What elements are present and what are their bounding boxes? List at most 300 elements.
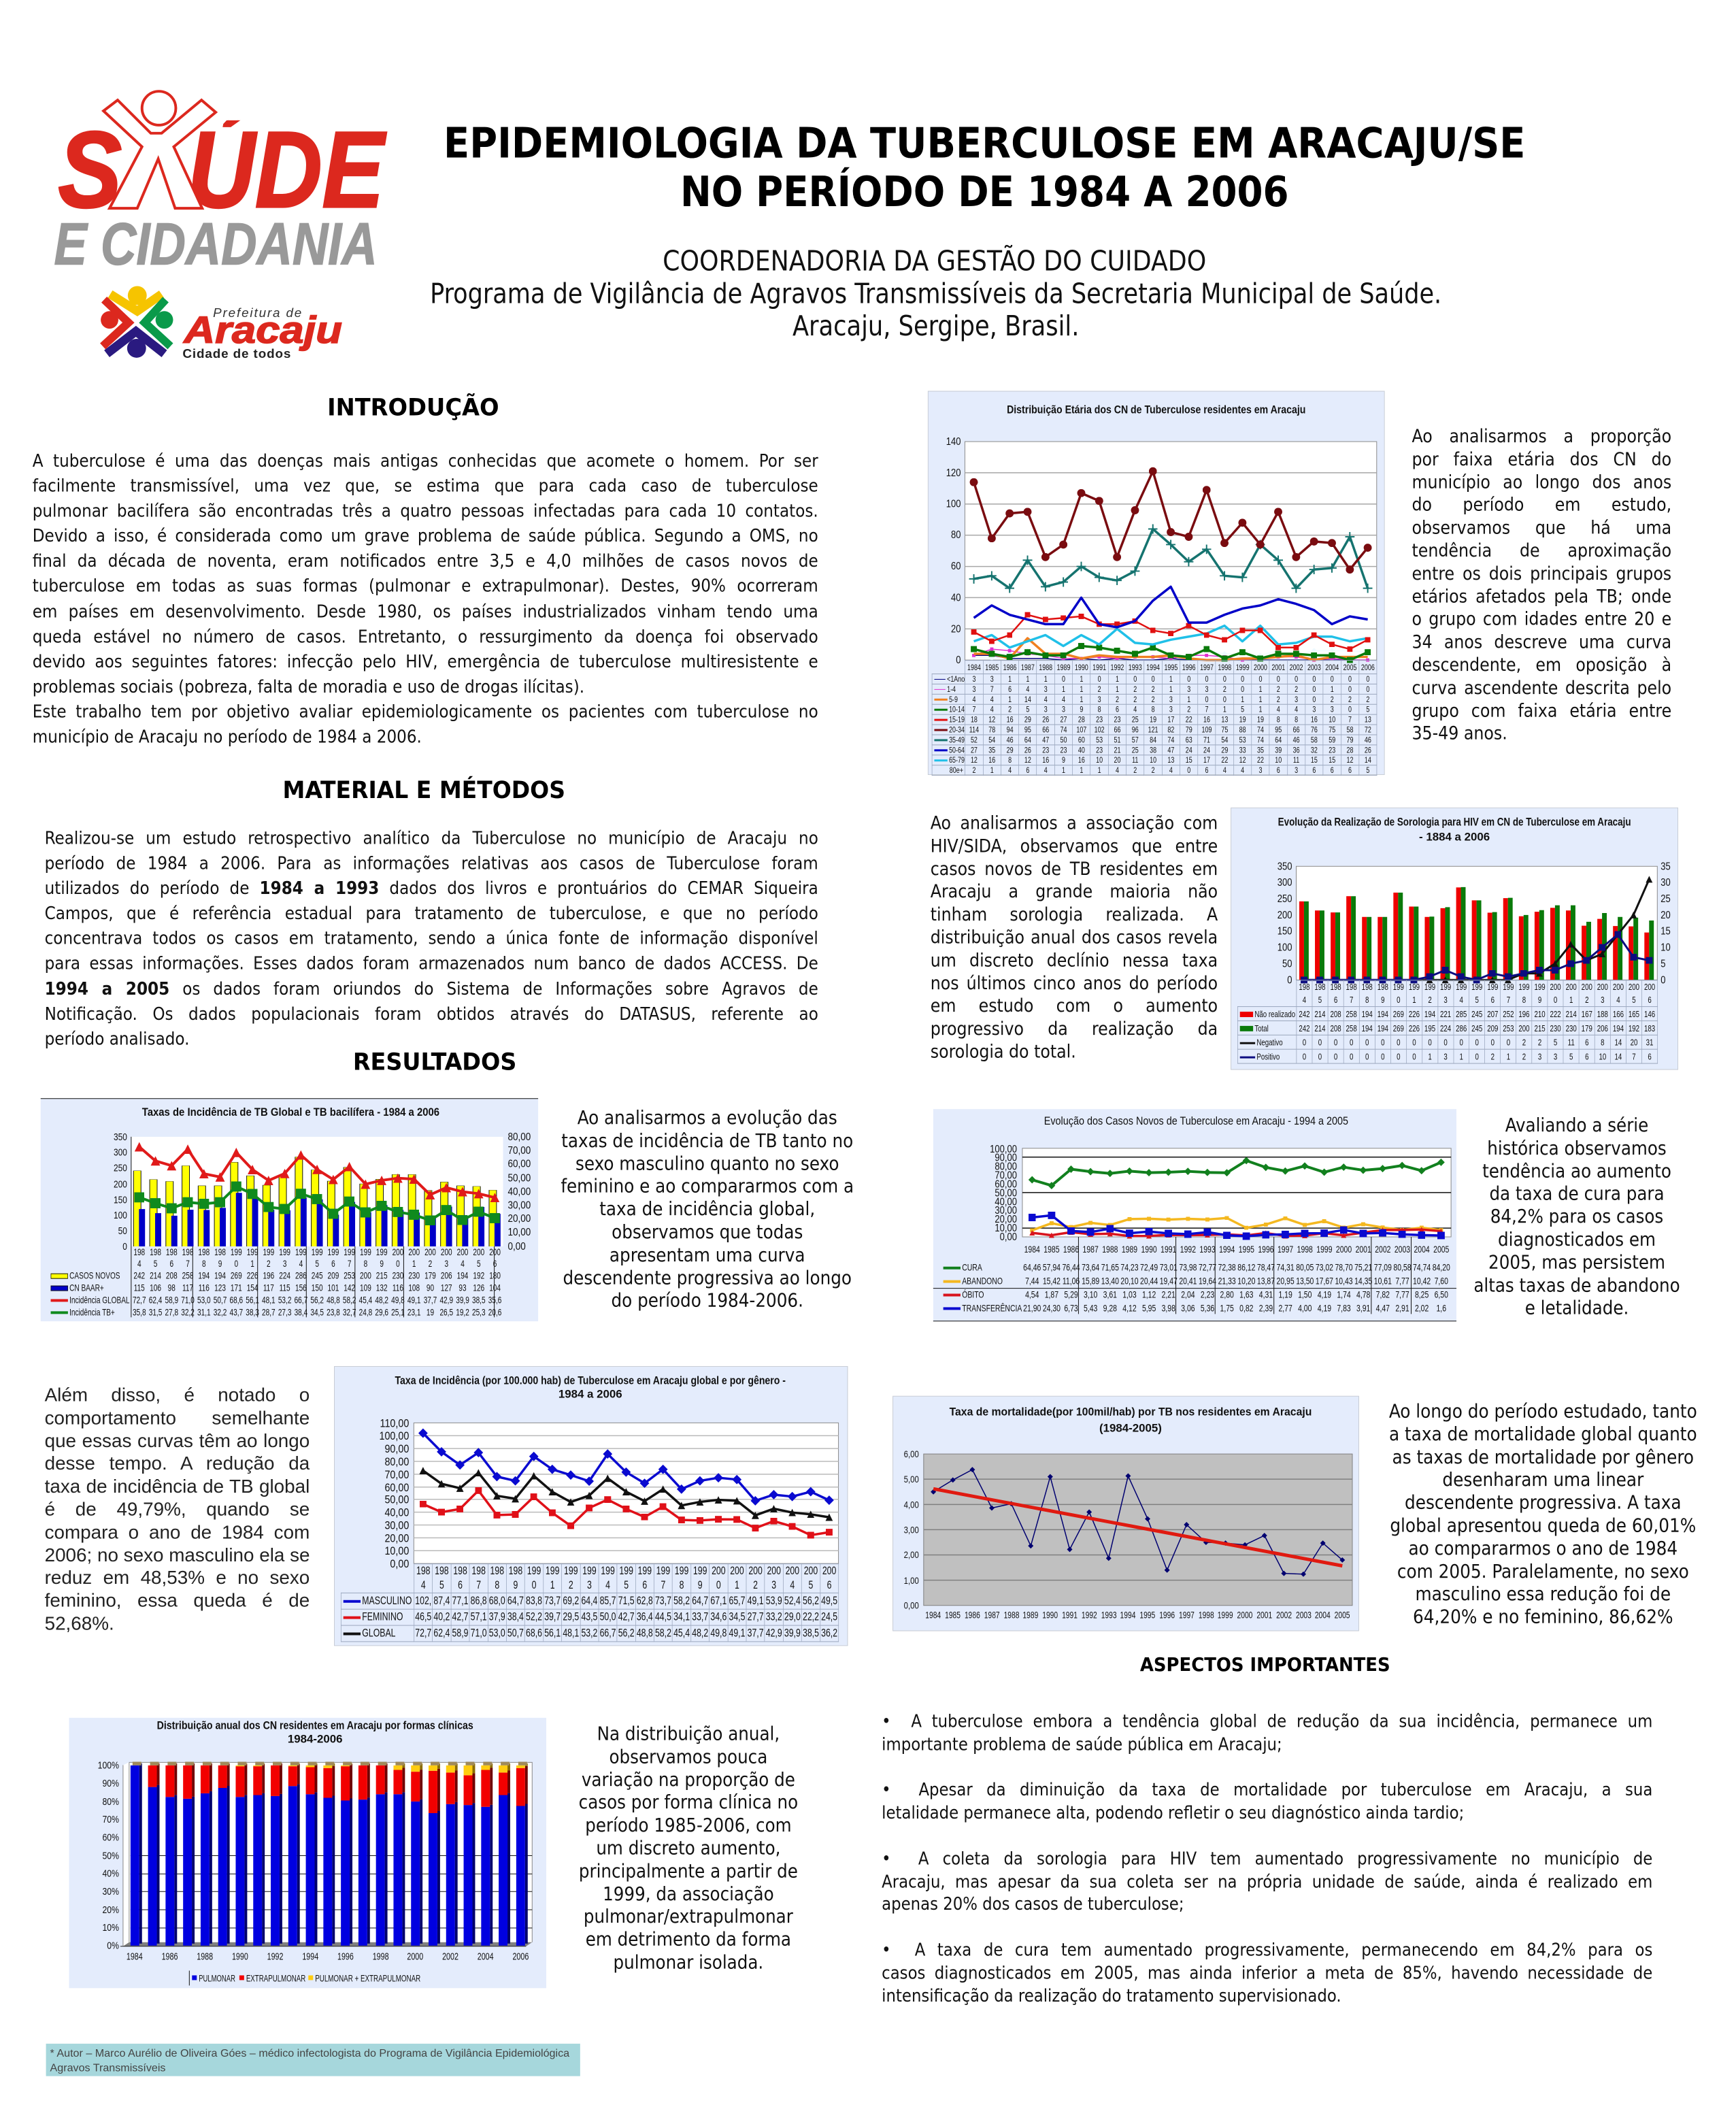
x axis: 1995 [1139, 1610, 1155, 1621]
left axis: 100 [1278, 942, 1292, 954]
text block: mortalidade: masculino essa redução foi de [1415, 1582, 1671, 1605]
data table: 0 [532, 1579, 536, 1591]
data table: 2 [1008, 705, 1012, 714]
data table: 71,5 [618, 1595, 635, 1607]
data table: 5 [1475, 995, 1479, 1005]
y axis: 6,00 [904, 1449, 919, 1459]
data table: 40 [1078, 745, 1085, 755]
data table: 57,94 [1043, 1262, 1061, 1273]
right axis: 15 [1660, 926, 1671, 938]
data table: 127 [441, 1282, 452, 1293]
data table: 7,60 [1435, 1276, 1448, 1287]
data table: 198 [1346, 982, 1357, 992]
data table: 198 [416, 1565, 431, 1577]
data table: 13,40 [1101, 1276, 1119, 1287]
data table: 1 [1044, 674, 1048, 684]
data table: 2 [1098, 684, 1101, 694]
data table: 65-79 [949, 755, 965, 765]
data table: 0 [1318, 1051, 1322, 1061]
data table: 5-9 [949, 695, 958, 704]
data table: 50-64 [949, 745, 965, 755]
data table: CASOS NOVOS [69, 1270, 120, 1280]
data table: 2006 [1361, 663, 1375, 672]
data table: 200 [712, 1565, 726, 1577]
x axis: 2000 [1237, 1610, 1252, 1621]
text block: distribuicao anual: variação na proporção de [582, 1769, 795, 1791]
text block: serie historica: altas taxas de abandono [1473, 1274, 1680, 1296]
data table: 58 [1347, 725, 1354, 734]
data table: 199 [376, 1247, 388, 1257]
data table: 23,1 [407, 1307, 421, 1317]
left axis: 350 [114, 1131, 127, 1142]
data table: 73,02 [1316, 1262, 1333, 1273]
data table: 1998 [1218, 663, 1231, 672]
y axis: 50,00 [995, 1187, 1017, 1199]
data table: 194 [1378, 1009, 1388, 1018]
data table: 199 [638, 1565, 652, 1577]
data table: 6 [1277, 765, 1280, 775]
data table: 3 [1312, 705, 1316, 714]
y axis: 110,00 [380, 1417, 410, 1430]
data table: 10 [1329, 715, 1335, 725]
data table: 7 [1348, 715, 1352, 725]
data table: 258 [1346, 1009, 1357, 1018]
data table: 1984 [1024, 1243, 1040, 1254]
data table: 56,1 [246, 1295, 259, 1305]
data table: 4 [1241, 765, 1244, 775]
data table: Positivo [1256, 1051, 1280, 1061]
data table: 1997 [1278, 1243, 1293, 1254]
logo: Prefeitura de Aracaju: Cidade de todos [182, 347, 290, 361]
text block: aspectos importantes: • A tuberculose embora a tendência global de redução da sua incidência, permanece um [882, 1712, 1652, 1732]
data table: 242 [1299, 1009, 1309, 1018]
data table: 1994 [1146, 663, 1160, 672]
x axis: 1990 [232, 1952, 248, 1963]
data table: 198 [1314, 982, 1326, 992]
text block: aspectos importantes: • A coleta da sorologia para HIV tem aumentado progressivamente no município de [882, 1849, 1652, 1869]
data table: 93 [458, 1282, 467, 1293]
data table: 0 [1491, 1037, 1495, 1047]
text block: material e metodos: Notificação. Os dados populacionais foram obtidos através do DATASUS, referente ao [45, 1004, 818, 1025]
data table: 3 [1044, 684, 1048, 694]
data table: 43,7 [230, 1307, 243, 1317]
data table: 15 [1329, 755, 1335, 765]
data table: 46,5 [415, 1611, 431, 1623]
data table: 6 [1026, 765, 1029, 775]
data table: 188 [1597, 1009, 1608, 1018]
data table: 208 [166, 1270, 178, 1280]
data table: 82 [1167, 725, 1174, 734]
data table: 179 [1582, 1023, 1592, 1033]
data table: 39,9 [456, 1295, 469, 1305]
data table: 6 [1491, 995, 1495, 1005]
data table: 0 [1241, 684, 1244, 694]
data table: 22,2 [803, 1611, 819, 1623]
data table: 0 [1443, 1037, 1448, 1047]
data table: 3 [1258, 765, 1262, 775]
footer: author note [46, 2044, 580, 2076]
data table: 73,98 [1179, 1262, 1197, 1273]
data table: 33,7 [692, 1611, 708, 1623]
data table: 192 [473, 1270, 484, 1280]
data table: 198 [453, 1565, 467, 1577]
data table: 4 [1133, 705, 1137, 714]
x axis: 1988 [1004, 1610, 1019, 1621]
text block: distribuicao anual [579, 1723, 798, 1973]
x axis: 1996 [337, 1952, 354, 1963]
heading: resultados: RESULTADOS [353, 1049, 516, 1076]
y axis: 70,00 [995, 1170, 1017, 1182]
data table: 115 [134, 1282, 145, 1293]
data table: 7,77 [1395, 1276, 1409, 1287]
right axis: 30 [1660, 877, 1671, 889]
data table: 86,12 [1237, 1262, 1255, 1273]
data table: 33,2 [766, 1611, 782, 1623]
right axis: 30,00 [507, 1199, 531, 1212]
data table: 7,82 [1376, 1289, 1390, 1299]
data table: 0 [1381, 1051, 1384, 1061]
data table: 1991 [1092, 663, 1106, 672]
data table: 198 [182, 1247, 193, 1257]
x axis: 1993 [1101, 1610, 1117, 1621]
data table: 27,8 [165, 1307, 178, 1317]
data table: 0 [1366, 684, 1369, 694]
series lines [1032, 1161, 1441, 1236]
data table: 27 [1061, 715, 1067, 725]
data table: 78,70 [1335, 1262, 1353, 1273]
data table: 165 [1629, 1009, 1639, 1018]
text block: proporcao por faixa etaria: por faixa etária dos CN do [1412, 449, 1671, 470]
text block: introducao: Devido a isso, é considerada como um grave problema de saúde pública. Segundo a OMS, no [33, 527, 818, 546]
data table: 198 [150, 1247, 161, 1257]
data table: 4 [1116, 765, 1119, 775]
y axis: 3,00 [904, 1525, 919, 1536]
legend [189, 1971, 420, 1985]
text block: evolucao das taxas: feminino e ao compararmos com a [561, 1175, 854, 1197]
x axis: 1994 [1120, 1610, 1136, 1621]
data table: 2 [1223, 684, 1226, 694]
data table: 199 [693, 1565, 707, 1577]
data table: 222 [1550, 1009, 1561, 1018]
y axis: 70% [102, 1814, 119, 1825]
data table: 2 [267, 1259, 271, 1269]
data table: 1 [1116, 684, 1119, 694]
data table: 8 [680, 1579, 684, 1591]
data table: FEMININO [362, 1611, 403, 1623]
data table: 24,30 [1043, 1302, 1061, 1313]
data table: 215 [376, 1270, 388, 1280]
data table: 78,47 [1257, 1262, 1275, 1273]
data table: 9 [698, 1579, 703, 1591]
data table: 2 [1152, 684, 1155, 694]
right axis: 0,00 [507, 1241, 526, 1253]
text block: associacao com HIV: HIV/SIDA, observamos que entre [931, 835, 1218, 857]
data table: 198 [198, 1247, 210, 1257]
data table: 214 [1314, 1009, 1326, 1018]
data table: 79 [1186, 725, 1192, 734]
chart panel: incidencia por genero [334, 1366, 848, 1646]
data table: 1 [1080, 765, 1083, 775]
data table: 2000 [1336, 1243, 1352, 1254]
y axis: 90,00 [384, 1443, 410, 1455]
data table: 86,8 [471, 1595, 487, 1607]
data table: 194 [214, 1270, 226, 1280]
logo: Saude e Cidadania: S [58, 109, 122, 230]
chart panel: sorologia HIV [1231, 808, 1678, 1070]
data table: 208 [1330, 1023, 1341, 1033]
data table: 1 [1008, 674, 1012, 684]
data table: 56,2 [618, 1627, 635, 1639]
x axis: 2000 [407, 1952, 423, 1963]
data table: 2,39 [1259, 1302, 1273, 1313]
data table [943, 1243, 1450, 1313]
data table: 7,83 [1337, 1302, 1351, 1313]
data table: Incidência GLOBAL [69, 1295, 130, 1305]
data table: 4 [1008, 765, 1012, 775]
data table: 72,38 [1218, 1262, 1236, 1273]
data table: 5 [1366, 705, 1369, 714]
x axis: 1998 [373, 1952, 389, 1963]
data table: 26,5 [439, 1307, 453, 1317]
y axis: 100,00 [990, 1144, 1017, 1155]
data table: 3,98 [1162, 1302, 1175, 1313]
data table: 22 [1257, 755, 1264, 765]
series lines [423, 1433, 829, 1535]
data table: 85,7 [600, 1595, 616, 1607]
text block: material e metodos: período de 1984 a 2006. Para as informações relativas aos casos de Tuberculose foram [45, 854, 818, 874]
heading: introducao: INTRODUÇÃO [327, 393, 499, 421]
data table: 200 [441, 1247, 452, 1257]
text block: proporcao por faixa etaria: etários afetados pela TB; onde [1412, 586, 1671, 607]
data table: 226 [1409, 1023, 1420, 1033]
right axis [507, 1131, 531, 1253]
data table: 2001 [1271, 663, 1285, 672]
text block: material e metodos: período analisado. [45, 1029, 189, 1049]
data table: 75 [1329, 725, 1335, 734]
text block: material e metodos: utilizados do período de 1984 a 1993 dados dos livros e prontuários do CEMAR Siqueira [45, 878, 818, 899]
y axis: 80,00 [384, 1456, 410, 1468]
data table: 8 [1522, 995, 1526, 1005]
data table: 230 [408, 1270, 420, 1280]
text block: proporcao por faixa etaria: curva ascendente descrita pelo [1412, 678, 1671, 699]
chart title: Distribuição Etária dos CN de Tuberculose residentes em Aracaju [1007, 403, 1305, 416]
data table: 9,28 [1103, 1302, 1117, 1313]
data table: 7 [990, 684, 994, 694]
data table: 2 [1277, 695, 1280, 704]
data table: 56,2 [803, 1595, 819, 1607]
text block: proporcao por faixa etaria: o grupo com idades entre 20 e [1412, 609, 1671, 630]
data table: 0 [1334, 1051, 1337, 1061]
data table: 2 [429, 1259, 432, 1269]
data table: 23 [1096, 715, 1103, 725]
y axis: 30,00 [384, 1519, 410, 1532]
data table: 194 [1362, 1023, 1373, 1033]
data table: 0 [1223, 674, 1226, 684]
text block: distribuicao anual: pulmonar isolada. [614, 1952, 763, 1973]
data table: 8 [1008, 755, 1012, 765]
text block: proporcao por faixa etaria: entre os dois principais grupos [1412, 563, 1671, 584]
bars: nao realizado [1301, 887, 1647, 980]
chart title [157, 1719, 473, 1746]
text block: alem disso: Além disso, é notado o [45, 1385, 310, 1406]
data table: 4 [1303, 995, 1306, 1005]
data table: 48,8 [637, 1627, 653, 1639]
data table: 25,1 [391, 1307, 405, 1317]
data table: 95 [1275, 725, 1282, 734]
data table: 4 [1062, 695, 1065, 704]
data table: 2 [1152, 765, 1155, 775]
y axis: 60,00 [384, 1482, 410, 1494]
data table: 38,5 [803, 1627, 819, 1639]
y axis: 20,00 [384, 1532, 410, 1545]
data table: 50,0 [600, 1611, 616, 1623]
data table: 0 [716, 1579, 721, 1591]
chart panel: distribuicao etaria [928, 391, 1385, 776]
legend: PULMONAR + EXTRAPULMONAR [315, 1972, 420, 1983]
right axis: 35 [1660, 861, 1671, 873]
data table: 199 [328, 1247, 339, 1257]
data table: 10-14 [949, 705, 965, 714]
title: EPIDEMIOLOGIA DA TUBERCULOSE EM ARACAJU/SE [444, 119, 1525, 168]
text block: material e metodos: para essas informações. Esses dados foram armazenados num banco de dados ACCESS. De [45, 954, 818, 974]
mortality line and trend [933, 1470, 1342, 1574]
data table: 4 [605, 1579, 610, 1591]
data table: 20,95 [1277, 1276, 1295, 1287]
data table: 230 [1566, 1023, 1577, 1033]
data table: 12 [971, 755, 978, 765]
data table: 0 [1303, 1037, 1306, 1047]
data table: 198 [490, 1565, 504, 1577]
data table: 2005 [1343, 663, 1356, 672]
data table: 39,9 [784, 1627, 801, 1639]
data table: 2 [1491, 1051, 1495, 1061]
data table: 3 [771, 1579, 776, 1591]
data table: 0 [1365, 1051, 1369, 1061]
data table: 1,03 [1122, 1289, 1137, 1299]
data table: 2 [1331, 695, 1334, 704]
data table: 52,4 [784, 1595, 801, 1607]
data table: 48,2 [692, 1627, 708, 1639]
data table: 245 [1471, 1009, 1482, 1018]
text block: alem disso: 2006; no sexo masculino ela se [45, 1544, 310, 1565]
data table: 8 [202, 1259, 206, 1269]
x axis: 1989 [1022, 1610, 1038, 1621]
text block: mortalidade: a taxa de mortalidade global quanto [1389, 1423, 1697, 1445]
data table: 194 [1362, 1009, 1373, 1018]
data table: 1,75 [1220, 1302, 1234, 1313]
data table: 1 [1223, 705, 1226, 714]
text block: associacao com HIV: Ao analisarmos a associação com [931, 813, 1218, 834]
bars: CN BAAR+ [142, 1193, 497, 1246]
data table: 1 [1169, 674, 1173, 684]
data table: 13 [1167, 755, 1174, 765]
data table: 199 [312, 1247, 323, 1257]
data table: 6 [1312, 765, 1316, 775]
chart title: 1984-2006 [288, 1733, 343, 1746]
data table: 1 [1241, 695, 1244, 704]
data table: 114 [969, 725, 979, 734]
data table: 6,50 [1435, 1289, 1448, 1299]
x axis: 2004 [478, 1952, 494, 1963]
data table: 199 [656, 1565, 670, 1577]
data table: 19 [1150, 715, 1156, 725]
data table: 14,35 [1354, 1276, 1372, 1287]
data table: 74 [1167, 735, 1174, 744]
left axis: 300 [1278, 877, 1292, 889]
data table: CN BAAR+ [69, 1282, 104, 1293]
data table: 31 [1646, 1037, 1653, 1047]
data table: 54 [988, 735, 995, 744]
data table: 226 [1409, 1009, 1420, 1018]
chart title: Distribuição anual dos CN residentes em Aracaju por formas clínicas [157, 1719, 473, 1732]
data table: 0 [1312, 674, 1316, 684]
data table: 4 [790, 1579, 795, 1591]
data table: 154 [247, 1282, 258, 1293]
data table: 200 [748, 1565, 763, 1577]
data table: 107 [1076, 725, 1086, 734]
data table: 2,02 [1415, 1302, 1429, 1313]
data table: 6 [1205, 765, 1209, 775]
stacked bars: fronts [135, 1765, 520, 1946]
data table: 13,87 [1257, 1276, 1275, 1287]
data table: 79 [1347, 735, 1354, 744]
text block: introducao: em países em desenvolvimento. Desde 1980, os países industrializados vinham tendo uma [33, 601, 818, 622]
data table: 1 [990, 765, 994, 775]
left axis: 0 [1287, 974, 1292, 987]
data table: 25 [1132, 745, 1139, 755]
data table: 286 [295, 1270, 307, 1280]
data table: 0 [1277, 674, 1280, 684]
data table: 4 [972, 695, 975, 704]
data table: 0 [1397, 1037, 1401, 1047]
data table: 2002 [1375, 1243, 1390, 1254]
x axis: 1992 [1082, 1610, 1097, 1621]
data table: 2 [1116, 695, 1119, 704]
data table: 2001 [1356, 1243, 1371, 1254]
data table: 24 [1186, 745, 1192, 755]
data table: 80,05 [1296, 1262, 1314, 1273]
x axis: 1997 [1179, 1610, 1195, 1621]
data table: 1 [1507, 1051, 1510, 1061]
data table: 4 [1223, 765, 1226, 775]
left axis [1278, 861, 1292, 987]
left axis: 200 [1278, 910, 1292, 921]
data table: 64 [1024, 735, 1031, 744]
data table: 0 [1331, 674, 1334, 684]
chart panel: taxa de mortalidade [892, 1396, 1359, 1631]
data table: 52,2 [526, 1611, 542, 1623]
y axis: 10,00 [384, 1545, 410, 1558]
data table: 16 [1007, 715, 1014, 725]
data table: 20,41 [1179, 1276, 1197, 1287]
data table: 5 [1366, 765, 1369, 775]
y axis: 40,00 [384, 1507, 410, 1519]
data table: 207 [1487, 1009, 1498, 1018]
chart panel: formas clinicas [69, 1718, 546, 1988]
data table: 49,1 [407, 1295, 421, 1305]
data table: MASCULINO [362, 1595, 412, 1607]
y axis: 100% [98, 1759, 119, 1771]
text block: introducao: Este trabalho tem por objetivo avaliar epidemiologicamente os pacientes com tuberculose no [33, 702, 818, 723]
data table: 199 [564, 1565, 578, 1577]
data table: 285 [1456, 1009, 1467, 1018]
data table: 0 [1187, 674, 1190, 684]
data table: 8 [1152, 705, 1155, 714]
text block: serie historica: histórica observamos [1487, 1138, 1667, 1159]
y axis: 40,00 [995, 1196, 1017, 1208]
chart title: (1984-2005) [1099, 1421, 1162, 1434]
x axis [925, 1610, 1350, 1621]
